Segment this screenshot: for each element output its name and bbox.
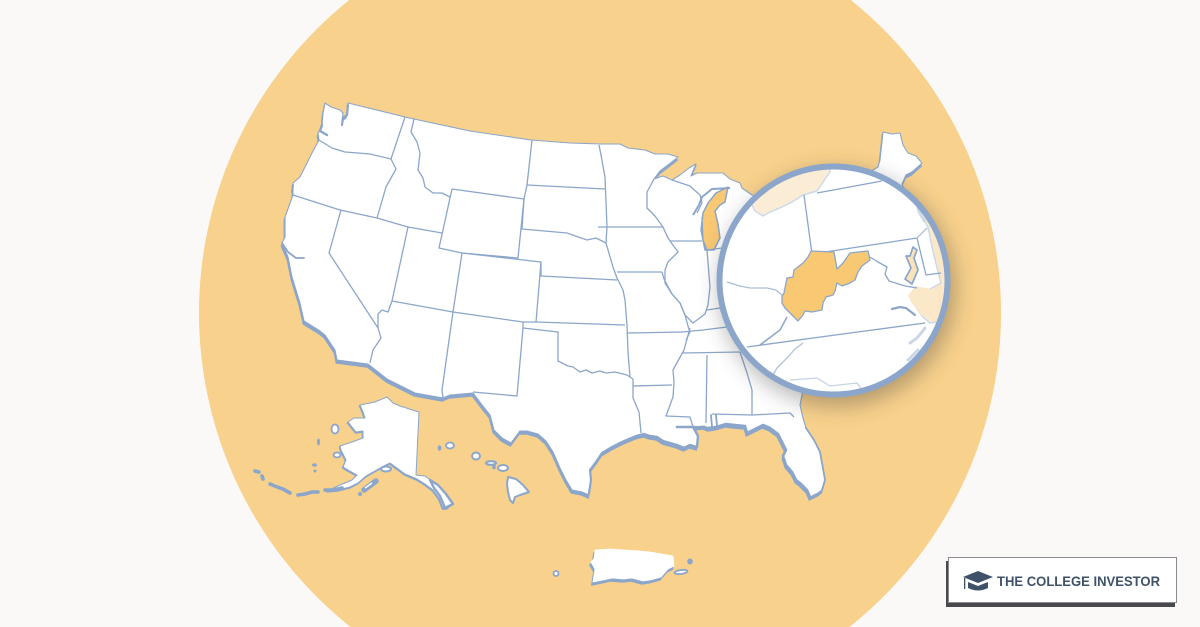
lens state borders — [727, 181, 941, 390]
lower bay — [908, 286, 931, 317]
icon: graduation cap — [963, 571, 993, 590]
state borders — [293, 117, 794, 433]
Hawaii — [438, 442, 529, 503]
James River — [892, 307, 915, 315]
background circle — [199, 0, 1001, 627]
Carolina sounds — [908, 328, 925, 360]
logo badge — [946, 558, 1176, 607]
lens drop shadow — [719, 170, 955, 406]
Chesapeake Bay — [905, 247, 918, 284]
Atlantic and bays — [910, 207, 944, 324]
Lake Michigan — [701, 187, 728, 250]
wordmark: THE COLLEGE INVESTOR — [997, 573, 1160, 589]
Alaska — [255, 397, 453, 509]
lens ring — [720, 166, 948, 394]
magnifying lens — [720, 160, 958, 394]
West Virginia — [782, 251, 870, 321]
Puerto Rico — [554, 549, 693, 585]
US map — [281, 103, 930, 500]
coastal detail — [282, 105, 825, 497]
Lake Erie — [752, 170, 831, 217]
lower 48 land — [281, 103, 930, 500]
